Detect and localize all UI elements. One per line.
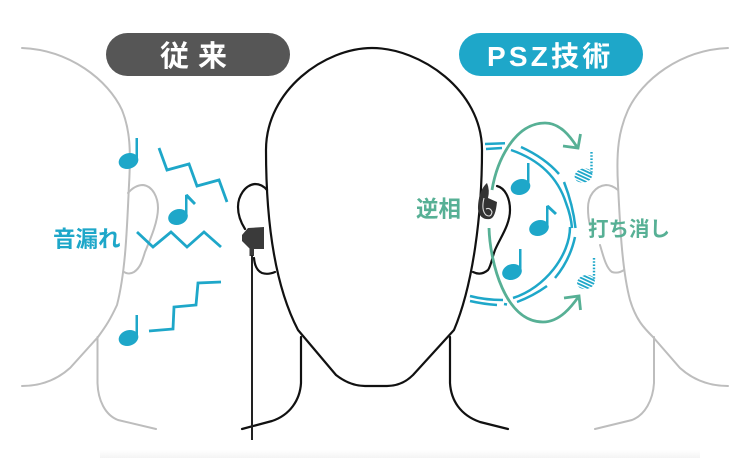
label: cancel out: 打ち消し xyxy=(588,218,670,241)
badge: PSZ technology: PSZ技術 xyxy=(487,41,613,72)
left profile head xyxy=(22,48,158,429)
badge: conventional xyxy=(106,33,290,76)
label: reverse phase: 逆相 xyxy=(416,197,461,222)
arrow: top cancel xyxy=(492,123,580,190)
bottom shadow xyxy=(100,450,700,458)
badge: conventional: 従来 xyxy=(160,40,236,73)
opposite-phase waves xyxy=(470,143,576,305)
music notes: right xyxy=(500,163,557,283)
front right ear xyxy=(473,186,510,274)
left head ear xyxy=(124,185,158,274)
music notes: left xyxy=(117,138,196,349)
arrow: bottom cancel xyxy=(489,228,580,322)
sound waves: leakage xyxy=(137,148,227,331)
label: sound leakage: 音漏れ xyxy=(53,227,121,252)
right profile head xyxy=(588,48,728,429)
cancelled notes: hatched xyxy=(573,152,597,291)
front left ear xyxy=(238,184,267,229)
neck and shoulders xyxy=(242,337,301,429)
right head ear xyxy=(588,185,624,273)
wired earbud xyxy=(242,227,264,440)
wireless earbud xyxy=(478,183,497,219)
badge: PSZ technology xyxy=(459,33,643,76)
front head xyxy=(238,48,510,429)
